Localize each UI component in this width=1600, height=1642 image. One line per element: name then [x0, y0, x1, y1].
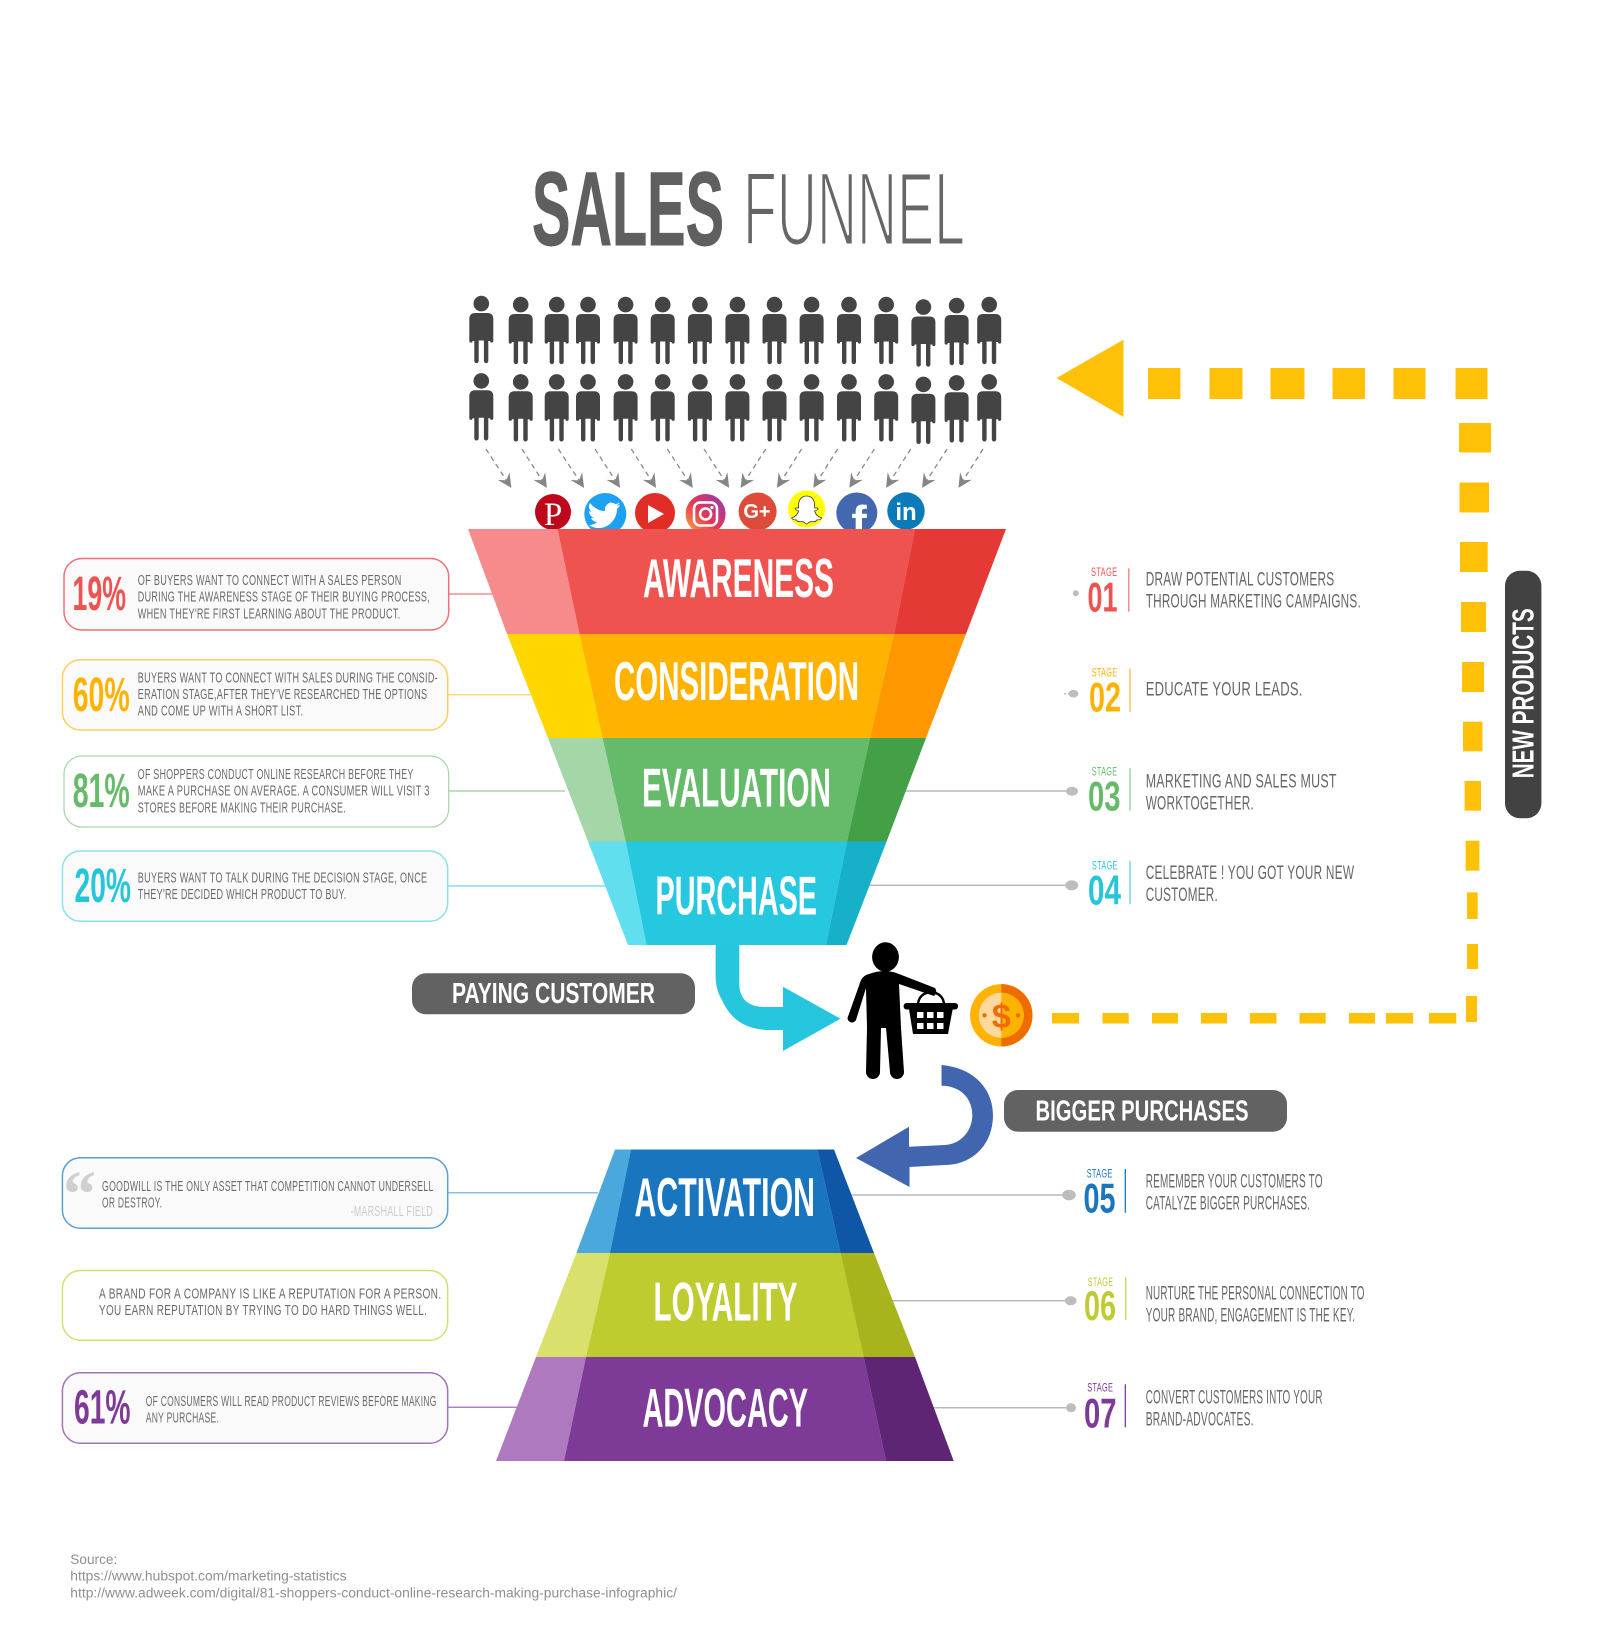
panel: 61% stat [62, 1373, 448, 1443]
label: new products [1505, 571, 1541, 818]
panel: goodwill quote: GOODWILL IS THE ONLY ASSET THAT COMPETITION CANNOT UNDERSELL [102, 1179, 434, 1195]
panel: brand quote: A BRAND FOR A COMPANY IS LIKE A REPUTATION FOR A PERSON. [99, 1287, 442, 1303]
lower funnel [496, 1150, 954, 1461]
funnel band: awareness: AWARENESS [643, 547, 834, 609]
panel: 81% stat: STORES BEFORE MAKING THEIR PURCHASE. [138, 800, 346, 816]
stage 04: 04 [1088, 866, 1121, 913]
icon: dollar coin: $ [992, 998, 1011, 1036]
panel: 60% stat [62, 660, 448, 730]
panel: brand quote [62, 1270, 448, 1340]
panel: 20% stat [62, 851, 448, 921]
icon: linkedin: in [895, 499, 917, 526]
arrow: new products loop dashes [1052, 340, 1491, 1024]
stage 03: WORKTOGETHER. [1146, 793, 1254, 814]
panel: 61% stat: ANY PURCHASE. [146, 1411, 219, 1427]
icon: google plus [739, 492, 777, 530]
stage 06: STAGE [1088, 1276, 1113, 1289]
stage 03: STAGE [1092, 765, 1118, 778]
panel: goodwill quote: OR DESTROY. [102, 1196, 162, 1212]
arrow: bigger purchases curve [856, 1065, 993, 1187]
title: FUNNEL [743, 151, 965, 268]
arrow: cyan funnel to customer [716, 945, 840, 1051]
stage 01: 01 [1088, 574, 1118, 621]
icon: pinterest [535, 494, 571, 533]
stage 05: REMEMBER YOUR CUSTOMERS TO [1146, 1172, 1323, 1193]
stage 07: STAGE [1087, 1381, 1113, 1394]
stage 05: STAGE [1087, 1167, 1113, 1180]
panel: 19% stat: DURING THE AWARENESS STAGE OF THEIR BUYING PROCESS, [138, 590, 430, 606]
panel: 81% stat: 81% [73, 765, 130, 818]
panel: goodwill quote [62, 1158, 448, 1231]
stage 06: NURTURE THE PERSONAL CONNECTION TO [1146, 1284, 1365, 1305]
connector lines upper funnel [448, 594, 1073, 886]
stage 07 [1066, 1381, 1323, 1436]
panel: 81% stat: OF SHOPPERS CONDUCT ONLINE RESEARCH BEFORE THEY [138, 767, 414, 783]
icon: snapchat [788, 490, 825, 528]
panel: 20% stat: THEY'RE DECIDED WHICH PRODUCT TO BUY. [138, 887, 346, 903]
stage 03 [1066, 765, 1337, 820]
stage 02: 02 [1089, 674, 1121, 721]
icon: linkedin [887, 492, 925, 530]
source citation: https://www.hubspot.com/marketing-statistics [70, 1569, 347, 1584]
upper funnel [468, 529, 1006, 945]
source citation: Source: [70, 1552, 117, 1567]
panel: 61% stat: 61% [74, 1381, 130, 1434]
panel: 60% stat: AND COME UP WITH A SHORT LIST. [138, 703, 303, 719]
stage 03: 03 [1088, 773, 1120, 820]
panel: 19% stat: 19% [72, 568, 126, 621]
icon: dollar coin [970, 984, 1032, 1046]
stage 07: CONVERT CUSTOMERS INTO YOUR [1146, 1387, 1323, 1408]
funnel band: awareness [468, 529, 1006, 634]
funnel band: activation: ACTIVATION [634, 1166, 815, 1228]
panel: 81% stat: MAKE A PURCHASE ON AVERAGE. A CONSUMER WILL VISIT 3 [138, 784, 430, 800]
source citation: http://www.adweek.com/digital/81-shoppers-conduct-online-research-making-purchase-infographic/ [70, 1585, 677, 1600]
panel: goodwill quote: -MARSHALL FIELD [351, 1204, 433, 1220]
icon: instagram [686, 494, 726, 534]
stage 05: 05 [1084, 1175, 1116, 1222]
stage 04 [1065, 859, 1354, 913]
funnel band: purchase [588, 842, 887, 945]
icon: customer with basket [848, 942, 958, 1079]
stage 06: YOUR BRAND, ENGAGEMENT IS THE KEY. [1146, 1306, 1355, 1327]
stage 01: STAGE [1091, 566, 1118, 579]
funnel band: advocacy [496, 1357, 954, 1461]
dashed arrows from crowd to social channels [486, 449, 983, 487]
funnel band: loyality: LOYALITY [654, 1270, 798, 1332]
icon: facebook [836, 492, 877, 548]
funnel band: loyality [536, 1253, 915, 1357]
icon: pinterest: P [544, 497, 562, 533]
icon: twitter [584, 493, 626, 535]
panel: 19% stat: WHEN THEY'RE FIRST LEARNING ABOUT THE PRODUCT. [138, 606, 401, 622]
stage 04: CELEBRATE ! YOU GOT YOUR NEW [1146, 863, 1354, 884]
panel: brand quote: YOU EARN REPUTATION BY TRYING TO DO HARD THINGS WELL. [99, 1303, 427, 1319]
funnel band: evaluation [548, 738, 926, 842]
funnel band: consideration [507, 634, 966, 738]
stage 06: 06 [1084, 1282, 1116, 1329]
panel: goodwill quote: “ [63, 1158, 96, 1231]
panel: 60% stat: 60% [73, 669, 130, 722]
label: bigger purchases [1004, 1090, 1287, 1132]
label: paying customer [412, 973, 695, 1014]
icon: google plus: G+ [743, 501, 771, 523]
funnel band: advocacy: ADVOCACY [642, 1376, 808, 1438]
stage 07: BRAND-ADVOCATES. [1146, 1409, 1254, 1430]
panel: 60% stat: ERATION STAGE,AFTER THEY'VE RESEARCHED THE OPTIONS [138, 687, 427, 703]
stage 02: EDUCATE YOUR LEADS. [1146, 679, 1303, 700]
panel: 20% stat: 20% [74, 860, 131, 913]
label: new products: NEW PRODUCTS [1506, 608, 1540, 778]
connector lines lower funnel [448, 1193, 1071, 1408]
funnel band: activation [576, 1150, 874, 1253]
stage 03: MARKETING AND SALES MUST [1146, 771, 1337, 792]
stage 01: THROUGH MARKETING CAMPAIGNS. [1146, 592, 1361, 613]
source citation [70, 1552, 677, 1600]
label: bigger purchases: BIGGER PURCHASES [1036, 1096, 1248, 1128]
funnel band: evaluation: EVALUATION [642, 756, 831, 818]
stage 01: DRAW POTENTIAL CUSTOMERS [1146, 569, 1334, 590]
stage 02 [1068, 667, 1303, 721]
stage 06 [1065, 1276, 1365, 1329]
panel: 61% stat: OF CONSUMERS WILL READ PRODUCT REVIEWS BEFORE MAKING [146, 1394, 437, 1410]
panel: 81% stat [64, 756, 449, 827]
stage 05 [1062, 1167, 1323, 1222]
icon group: crowd of people [469, 296, 1001, 444]
panel: 19% stat [64, 558, 449, 630]
stage 05: CATALYZE BIGGER PURCHASES. [1146, 1194, 1310, 1215]
social media icons [535, 490, 925, 548]
panel: 60% stat: BUYERS WANT TO CONNECT WITH SALES DURING THE CONSID- [138, 670, 438, 686]
panel: 19% stat: OF BUYERS WANT TO CONNECT WITH A SALES PERSON [138, 573, 402, 589]
funnel band: purchase: PURCHASE [656, 864, 817, 926]
label: paying customer: PAYING CUSTOMER [452, 978, 655, 1010]
stage 01 [1073, 566, 1361, 621]
panel: 20% stat: BUYERS WANT TO TALK DURING THE DECISION STAGE, ONCE [138, 871, 427, 887]
title: SALES [532, 151, 724, 268]
stage 04: STAGE [1092, 859, 1118, 872]
stage 07: 07 [1084, 1389, 1116, 1436]
icon: facebook: f [851, 496, 867, 548]
icon: youtube [635, 493, 675, 533]
funnel band: consideration: CONSIDERATION [614, 650, 859, 712]
stage 02: STAGE [1092, 667, 1118, 680]
stage 04: CUSTOMER. [1146, 885, 1218, 906]
